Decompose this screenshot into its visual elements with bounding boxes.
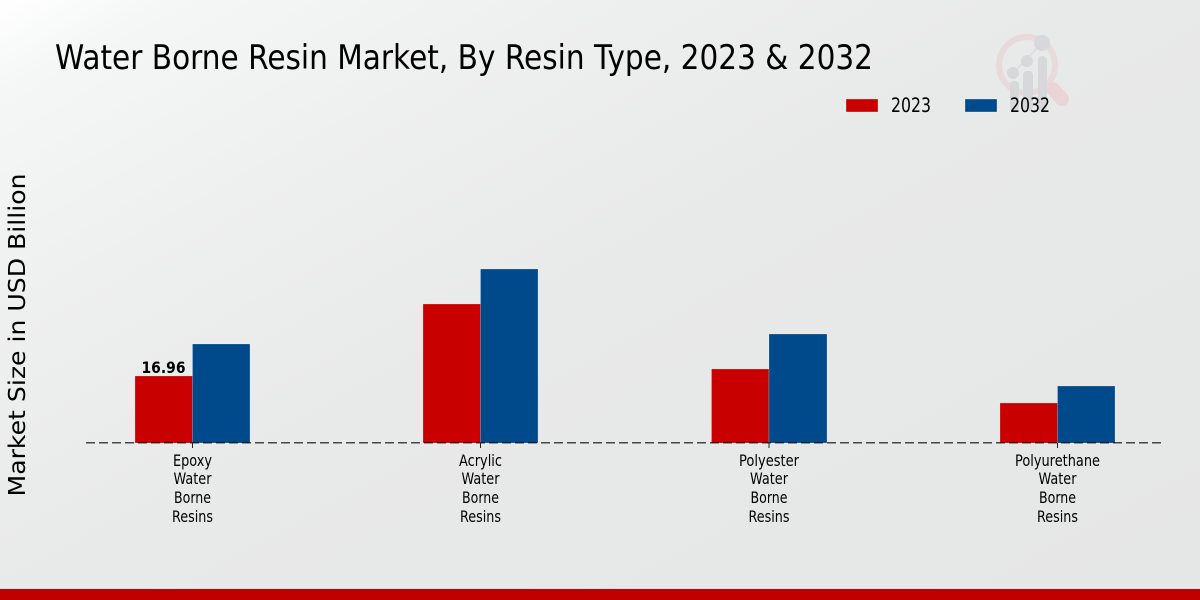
category label: Polyurethane Water Borne Resins: Borne xyxy=(1039,488,1076,507)
x axis line xyxy=(86,442,1165,444)
category label: Polyester Water Borne Resins: Water xyxy=(750,469,788,488)
category label: Acrylic Water Borne Resins xyxy=(459,451,502,526)
bars: Epoxy xyxy=(135,344,250,443)
data label: 16.96: 16.96 xyxy=(142,358,186,377)
footer bar xyxy=(0,589,1200,600)
category label: Acrylic Water Borne Resins: Water xyxy=(462,469,500,488)
legend label: 2023: 2023 xyxy=(891,94,931,117)
category label: Acrylic Water Borne Resins: Acrylic xyxy=(459,451,502,470)
bars: Acrylic xyxy=(423,269,538,443)
legend xyxy=(846,94,1050,117)
category label: Polyurethane Water Borne Resins: Polyurethane xyxy=(1015,451,1100,470)
y axis label: Market Size in USD Billion xyxy=(3,174,31,496)
category label: Epoxy Water Borne Resins: Resins xyxy=(172,507,213,526)
bars: Polyester xyxy=(712,334,827,443)
category label: Polyester Water Borne Resins: Polyester xyxy=(739,451,799,470)
category label: Polyurethane Water Borne Resins xyxy=(1015,451,1100,526)
bars: Polyurethane xyxy=(1000,386,1115,443)
category label: Epoxy Water Borne Resins: Water xyxy=(174,469,212,488)
category label: Acrylic Water Borne Resins: Resins xyxy=(460,507,501,526)
legend swatch: 2023 xyxy=(846,99,878,112)
category label: Polyester Water Borne Resins: Resins xyxy=(748,507,790,526)
category label: Polyester Water Borne Resins: Borne xyxy=(750,488,788,507)
bar chart xyxy=(86,269,1165,448)
category label: Polyurethane Water Borne Resins: Resins xyxy=(1037,507,1078,526)
title: Water Borne Resin Market, By Resin Type, 2023 & 2032 xyxy=(55,38,873,77)
category label: Acrylic Water Borne Resins: Borne xyxy=(462,488,499,507)
category label: Epoxy Water Borne Resins: Epoxy xyxy=(173,451,212,470)
legend swatch: 2032 xyxy=(965,99,997,112)
category label: Epoxy Water Borne Resins: Borne xyxy=(174,488,211,507)
category label: Polyester Water Borne Resins xyxy=(739,451,799,526)
icon: watermark logo xyxy=(999,35,1062,111)
category label: Epoxy Water Borne Resins xyxy=(172,451,213,526)
legend label: 2032: 2032 xyxy=(1010,94,1050,117)
category label: Polyurethane Water Borne Resins: Water xyxy=(1038,469,1077,488)
